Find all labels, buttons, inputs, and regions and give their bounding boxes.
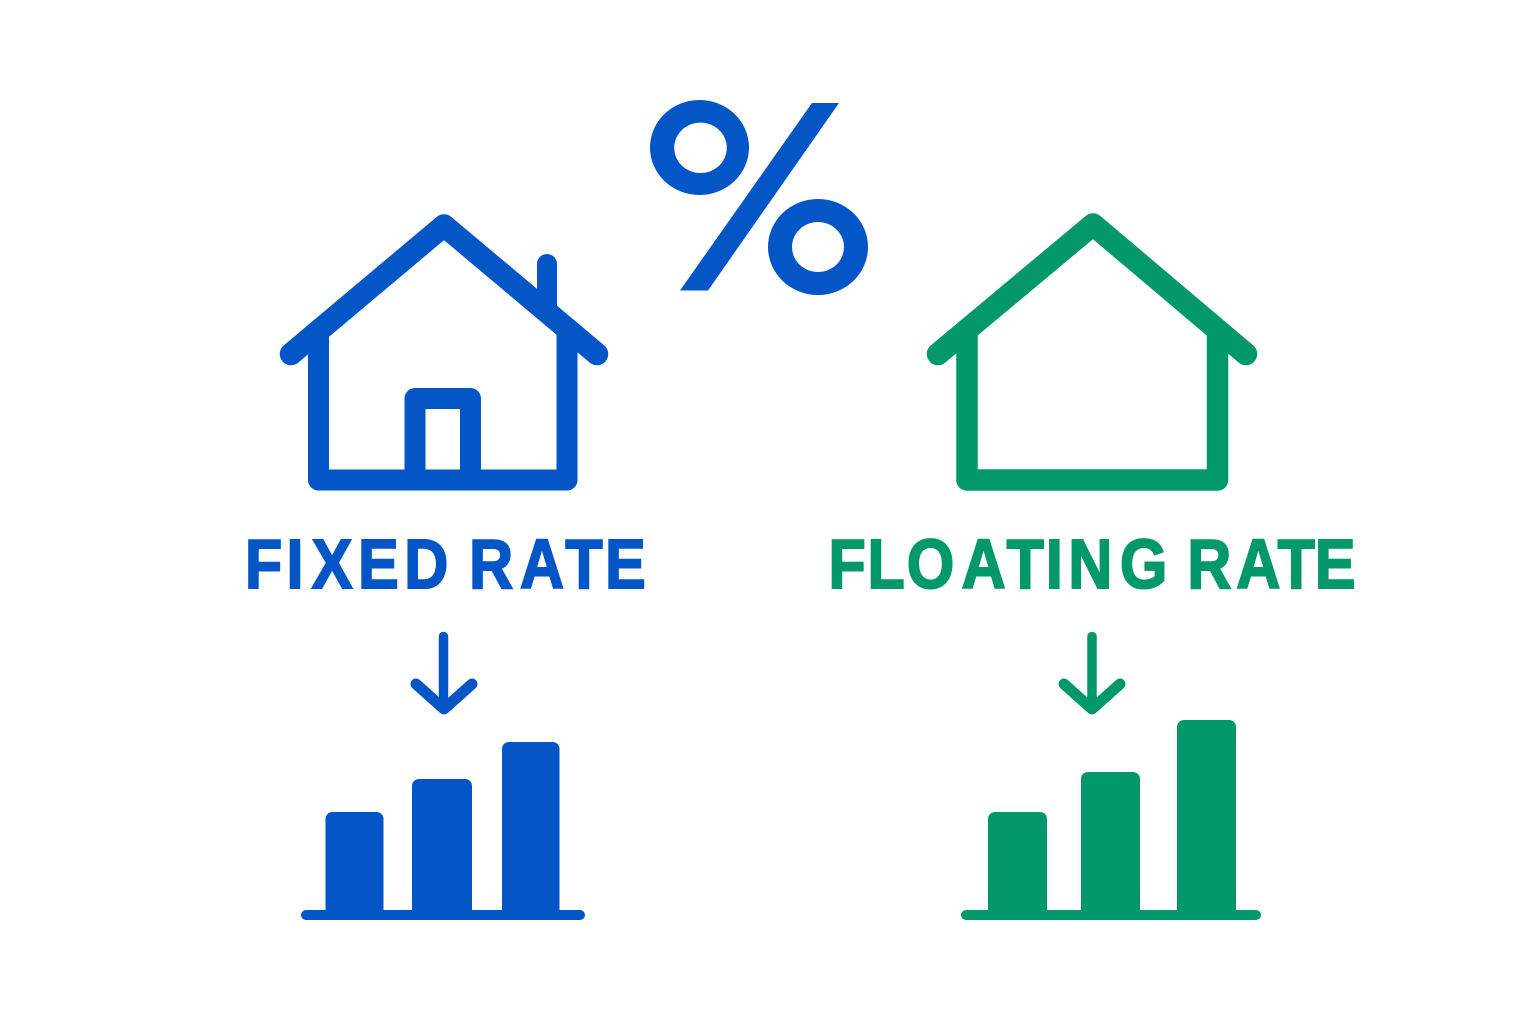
heading: floating rate: FLOATING RATE (829, 525, 1355, 603)
arrow: green down (1064, 636, 1120, 709)
icon: green house (938, 224, 1246, 480)
heading: fixed rate: FIXED RATE (245, 525, 646, 603)
bar chart: floating rate (961, 720, 1261, 920)
icon: percent symbol (650, 100, 868, 295)
icon: blue house (291, 226, 597, 480)
arrow: blue down (416, 636, 472, 709)
bar chart: fixed rate (301, 742, 585, 920)
